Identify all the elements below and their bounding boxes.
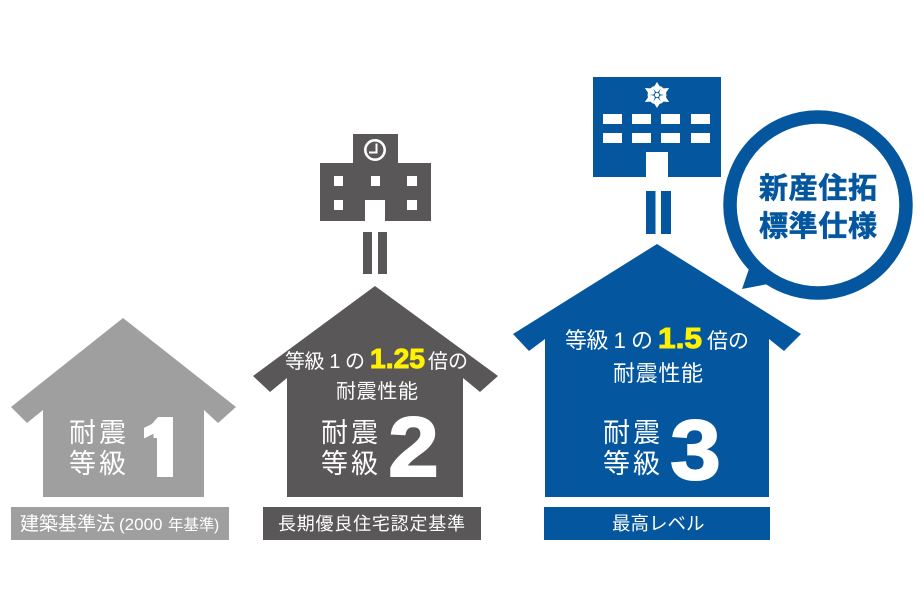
callout text: 標準仕様 [759,210,877,243]
icon: blue building [593,77,721,177]
infographic: seismic grades [11,77,913,540]
text: grade 3 description: 倍の [707,330,749,353]
text: grade 2 description: 倍の [428,350,468,373]
text: grade 2 description: 耐震性能 [336,380,418,403]
text: grade 2 description: 等級 1 の [285,350,365,373]
caption: grade 1 standard: (2000 [119,515,162,534]
caption: grade 3 standard: 最高レベル [612,513,705,534]
number: 2: 2 [388,400,439,494]
icon: gray school building [320,134,431,221]
panel: grade 3 house [513,244,801,497]
label: grade 1 kanji: 耐震 [69,418,126,448]
icon: blue equals bars [646,191,671,234]
callout: speech bubble [730,117,906,293]
icon: gray equals bars [363,232,387,274]
panel: grade 2 house [253,286,498,497]
caption: grade 2 standard: 長期優良住宅認定基準 [278,514,465,534]
label: grade 2 kanji: 耐震 [321,418,378,448]
text: grade 3 description [565,323,749,386]
label: grade 3 kanji [603,418,660,479]
text: grade 3 description: 耐震性能 [613,361,703,386]
label: grade 3 kanji: 耐震 [603,418,660,448]
label: grade 2 kanji [321,418,378,479]
caption: grade 3 standard [544,507,770,540]
label: grade 2 kanji: 等級 [321,449,378,479]
caption: grade 1 standard [11,507,229,540]
caption: grade 1 standard: 建築基準法 [20,514,115,535]
label: grade 1 kanji [69,418,126,479]
caption: grade 2 standard [263,507,481,540]
text: grade 3 description: 1.5 [658,323,702,355]
callout text: 新産住拓 [759,172,877,205]
icon: clock [365,140,385,160]
callout text [759,172,877,243]
panel: grade 1 house [11,318,236,497]
text: grade 2 description: 1.25 [370,343,425,374]
number: 1: 1 [133,400,191,496]
text: grade 3 description: 等級 1 の [565,328,653,353]
label: grade 3 kanji: 等級 [603,449,660,479]
caption: grade 1 standard: 年基準 [168,516,215,534]
caption: grade 1 standard: ) [214,517,219,534]
text: grade 2 description [285,343,468,403]
icon: snowflake emblem [642,82,672,108]
label: grade 1 kanji: 等級 [69,449,126,479]
number: 3: 3 [670,403,721,497]
